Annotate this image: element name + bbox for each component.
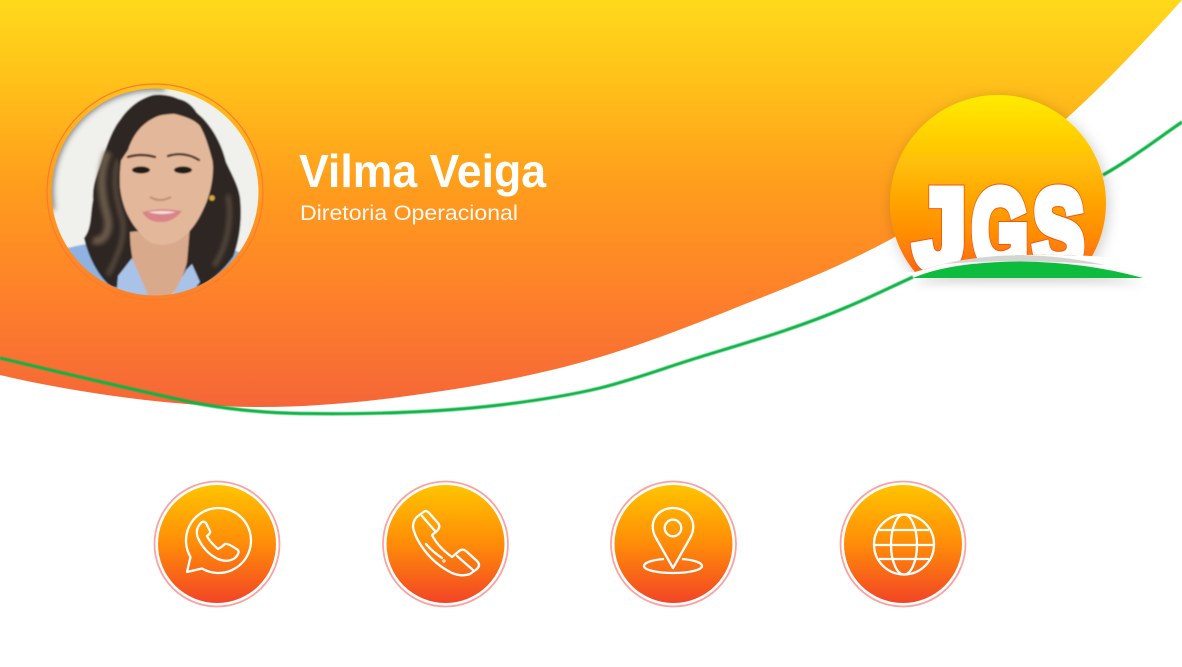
- eyes: [132, 166, 150, 174]
- logo letters: G: [972, 167, 1028, 292]
- photo inner shadow: [50, 87, 165, 210]
- icon: globe: [874, 514, 934, 574]
- icon: phone: [413, 511, 479, 575]
- logo letters shadow: G: [972, 167, 1028, 292]
- logo letters shadow: S: [1033, 167, 1084, 292]
- lips: [142, 209, 182, 222]
- logo green hill: [913, 262, 1143, 278]
- neck: [130, 226, 190, 300]
- name: Vilma Veiga: [299, 145, 546, 197]
- eyebrows: [128, 154, 199, 160]
- logo grey crescent: [945, 255, 1105, 265]
- logo sun: [886, 92, 1114, 272]
- collar: [116, 258, 200, 300]
- earring: [209, 195, 215, 201]
- logo letters shadow: J: [914, 167, 966, 292]
- portrait ring: [47, 84, 263, 300]
- logo letters: J: [914, 167, 966, 292]
- button: whatsapp: [154, 482, 280, 606]
- icon: location pin: [644, 508, 702, 573]
- button: location: [611, 482, 736, 606]
- logo letters shadow: [910, 184, 1086, 270]
- hair back: [84, 95, 241, 288]
- portrait photo: [50, 87, 260, 300]
- shirt: [68, 244, 240, 288]
- header background shape: [0, 0, 1182, 407]
- button: web: [840, 482, 966, 606]
- face: [120, 114, 213, 245]
- icon: whatsapp: [186, 508, 251, 573]
- JGS logo: [890, 95, 1143, 311]
- hair fringe: [118, 98, 214, 164]
- portrait: [47, 84, 263, 300]
- logo letters: [910, 184, 1084, 270]
- button: phone: [383, 482, 508, 606]
- role: Diretoria Operacional: [300, 202, 518, 225]
- logo letters: S: [1033, 167, 1084, 292]
- nose: [150, 197, 171, 200]
- hair highlights: [93, 152, 108, 241]
- green curve: [0, 122, 1182, 414]
